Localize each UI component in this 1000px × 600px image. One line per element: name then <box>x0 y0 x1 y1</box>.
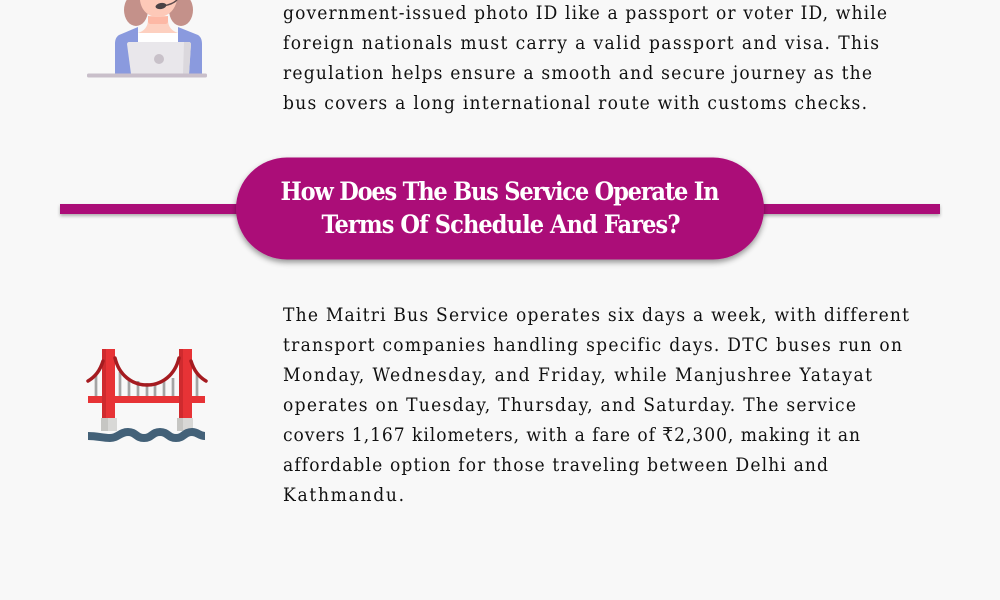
heading banner <box>60 158 940 260</box>
body text: identification requirements: bus covers a long international route with customs checks. <box>283 92 867 114</box>
heading text: Terms Of Schedule And Fares? <box>322 210 680 239</box>
icon: support agent with laptop <box>87 0 207 78</box>
body text: schedule and fares: covers 1,167 kilometers, with a fare of ₹2,300, making it an <box>283 424 860 446</box>
heading text <box>280 177 720 239</box>
body text: schedule and fares: Kathmandu. <box>283 484 404 506</box>
body text: schedule and fares: operates on Tuesday, Thursday, and Saturday. The service <box>283 394 856 416</box>
icon: suspension bridge <box>88 349 206 438</box>
body text: identification requirements <box>283 2 887 114</box>
body text: identification requirements: government-issued photo ID like a passport or voter ID, while <box>283 2 887 24</box>
body text: identification requirements: foreign nationals must carry a valid passport and visa. This <box>283 32 879 54</box>
heading text: How Does The Bus Service Operate In <box>280 177 720 206</box>
body text: schedule and fares: Monday, Wednesday, and Friday, while Manjushree Yatayat <box>283 364 872 386</box>
body text: schedule and fares: transport companies handling specific days. DTC buses run on <box>283 334 902 356</box>
body text: schedule and fares <box>283 304 909 506</box>
body text: identification requirements: regulation helps ensure a smooth and secure journey as the <box>283 62 872 84</box>
body text: schedule and fares: The Maitri Bus Service operates six days a week, with different <box>283 304 909 326</box>
body text: schedule and fares: affordable option for those traveling between Delhi and <box>283 454 828 476</box>
